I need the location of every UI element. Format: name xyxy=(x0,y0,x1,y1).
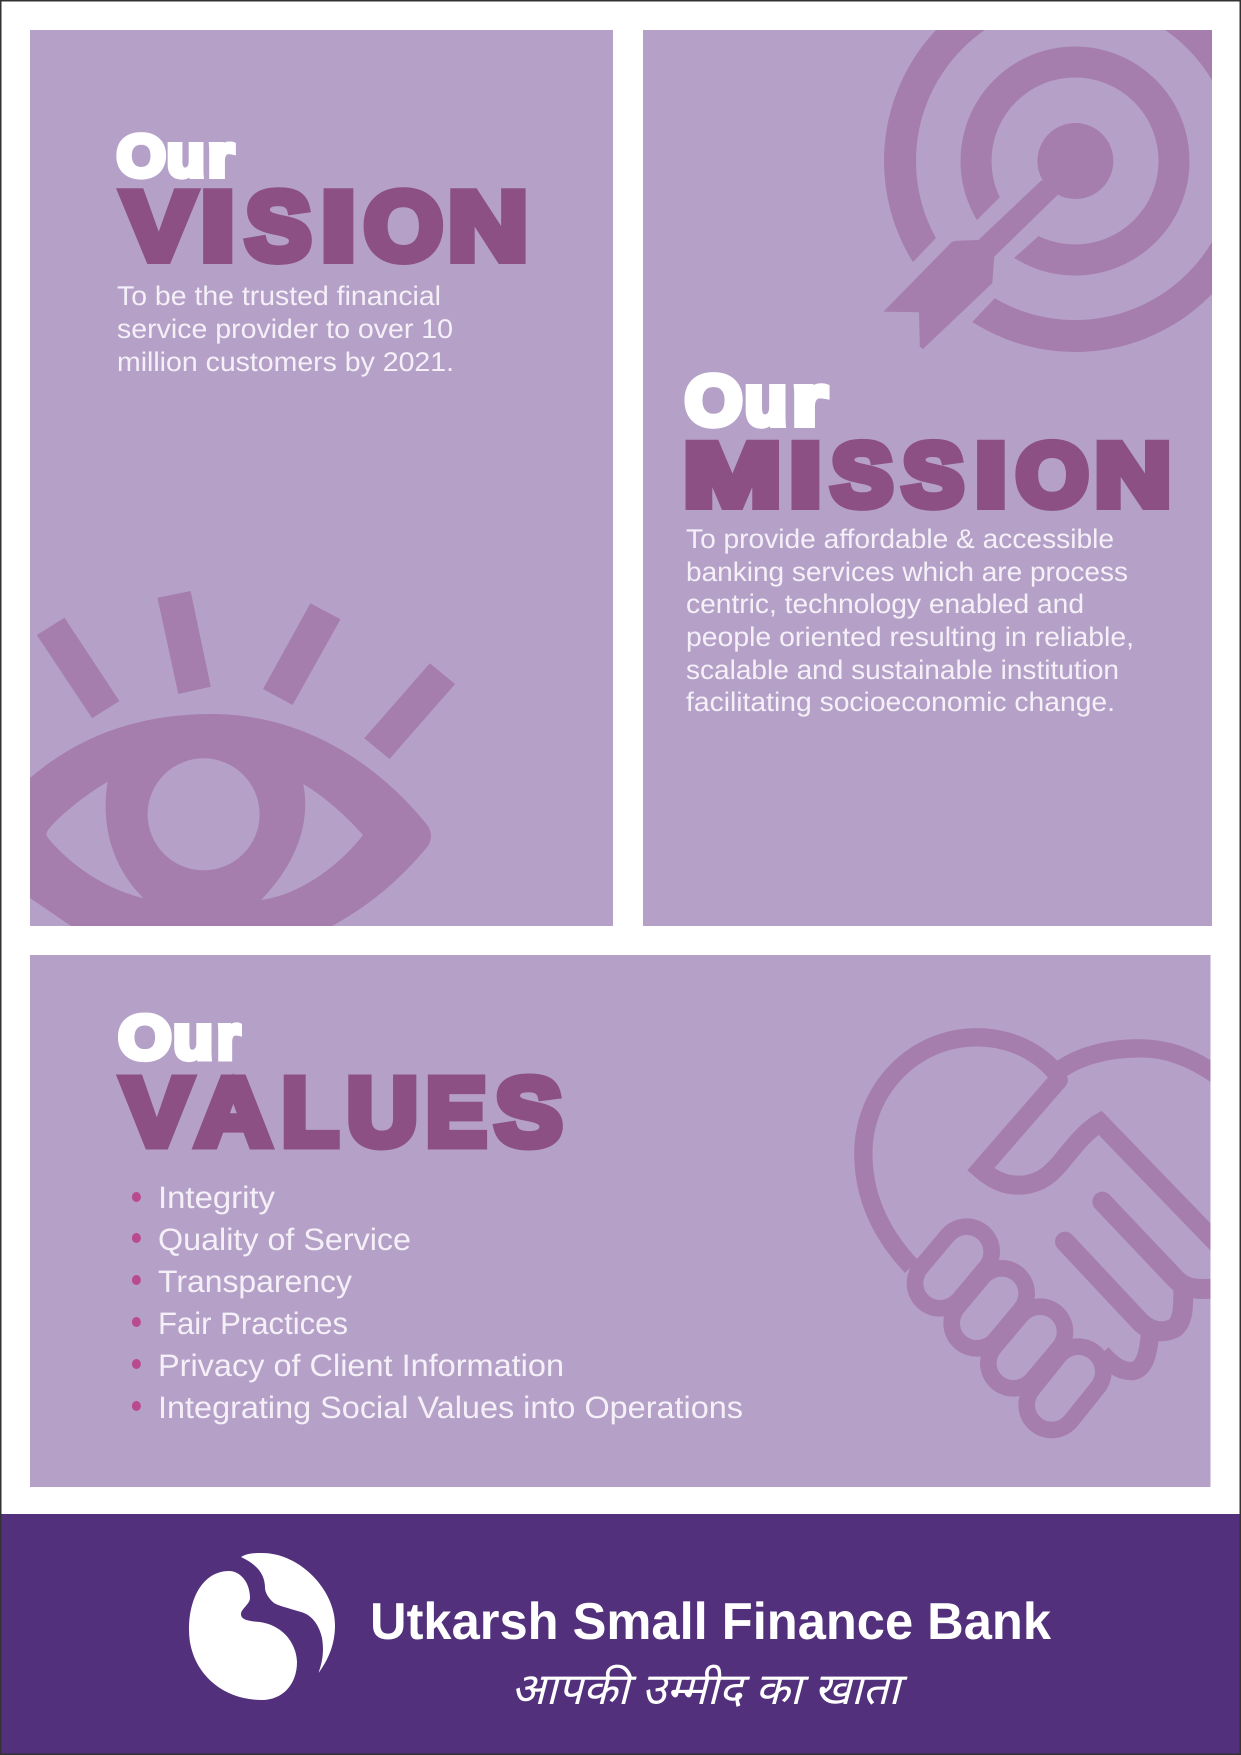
icon: bank logo xyxy=(189,1553,335,1700)
heading: Our Mission: N xyxy=(1095,424,1171,524)
mission statement text: centric, technology enabled and xyxy=(686,589,1084,619)
heading: Our Vision: r xyxy=(208,124,234,189)
heading: Our Mission: S xyxy=(903,424,964,524)
heading: Our Vision: u xyxy=(167,124,205,189)
vision statement text xyxy=(117,281,454,377)
heading: Our Mission: O xyxy=(1016,424,1088,524)
values bullet list xyxy=(132,1180,743,1425)
mission statement text: To provide affordable & accessible xyxy=(686,524,1114,554)
icon: target with arrow xyxy=(884,30,1212,352)
mission statement text: banking services which are process xyxy=(686,557,1128,587)
icon: eye with rays xyxy=(30,591,455,926)
heading: Our Values: A xyxy=(196,1059,271,1166)
heading: Our Vision: O xyxy=(364,172,443,280)
tagline in Hindi: आपकी उम्मीद का खाता xyxy=(511,1664,908,1714)
mission statement text: facilitating socioeconomic change. xyxy=(686,687,1115,717)
panel: mission xyxy=(643,0,1241,926)
heading: Our Mission: M xyxy=(684,424,781,524)
vision statement text: To be the trusted financial xyxy=(117,281,441,311)
footer band xyxy=(0,1514,1241,1755)
values panel background xyxy=(30,955,1210,1487)
heading: Our Mission xyxy=(684,362,1171,524)
heading: Our Values: E xyxy=(426,1059,486,1166)
heading: Our Vision: S xyxy=(246,172,311,280)
vision statement text: service provider to over 10 xyxy=(117,314,453,344)
mission statement text: people oriented resulting in reliable, xyxy=(686,622,1134,652)
icon: handshake heart xyxy=(863,1037,1217,1405)
heading: Our Values: S xyxy=(495,1059,562,1166)
values bullet list: Transparency xyxy=(158,1264,353,1299)
heading: Our Vision: I xyxy=(201,172,235,280)
heading: Our Vision: V xyxy=(122,172,195,280)
values bullet list: Privacy of Client Information xyxy=(158,1348,564,1383)
heading: Our Mission: r xyxy=(792,362,826,440)
panel: vision xyxy=(30,30,613,926)
bank name: Utkarsh Small Finance Bank xyxy=(370,1593,1051,1651)
heading: Our Values: O xyxy=(118,1003,171,1072)
mission statement text: scalable and sustainable institution xyxy=(686,655,1119,685)
heading: Our Mission: u xyxy=(745,362,787,440)
heading: Our Values: U xyxy=(347,1059,418,1166)
values bullet list: Integrating Social Values into Operations xyxy=(158,1390,743,1425)
heading: Our Values xyxy=(118,1003,562,1166)
heading: Our Values: r xyxy=(217,1003,240,1072)
heading: Our Values: u xyxy=(173,1003,213,1072)
values bullet list: Integrity xyxy=(158,1180,276,1215)
heading: Our Values: V xyxy=(122,1059,191,1166)
values bullet list: Fair Practices xyxy=(158,1306,348,1341)
heading: Our Values: L xyxy=(282,1059,338,1166)
heading: Our Mission: I xyxy=(975,424,1007,524)
heading: Our Vision: N xyxy=(448,172,528,280)
footer background xyxy=(0,1514,1241,1755)
heading: Our Mission: I xyxy=(790,424,821,524)
mission statement text xyxy=(686,524,1134,717)
values bullet list: Quality of Service xyxy=(158,1222,411,1257)
heading: Our Mission: S xyxy=(831,424,893,524)
heading: Our Vision: I xyxy=(321,172,356,280)
panel: values xyxy=(30,955,1217,1487)
mission panel background xyxy=(643,30,1212,926)
vision panel background xyxy=(30,30,613,926)
heading: Our Mission: O xyxy=(685,362,742,440)
heading: Our Vision: O xyxy=(117,124,166,189)
vision statement text: million customers by 2021. xyxy=(117,347,454,377)
heading: Our Vision xyxy=(117,124,528,280)
